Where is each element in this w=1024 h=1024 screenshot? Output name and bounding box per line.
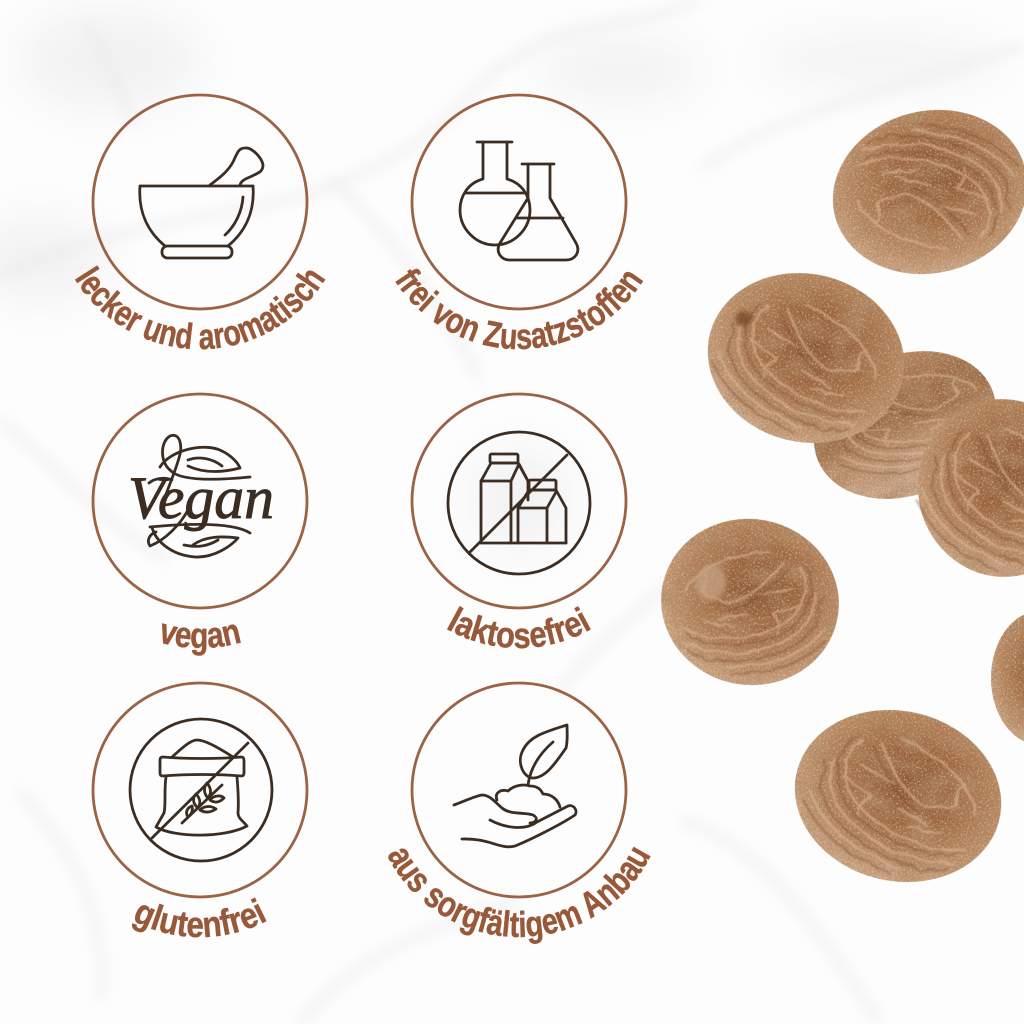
ring	[93, 394, 307, 608]
nutmeg cluster	[648, 89, 1024, 902]
bottom leaf and swash	[148, 510, 250, 557]
top leaf and swash	[149, 435, 250, 500]
label: vegan	[162, 623, 241, 656]
nutmeg: right edge lower	[991, 611, 1024, 745]
icon: crossed milk cartons	[448, 432, 590, 574]
nutmeg: behind, centre right	[792, 325, 1018, 525]
panel: glutenfrei	[92, 682, 308, 938]
panel: laktosefrei	[410, 392, 628, 648]
ring	[412, 95, 626, 309]
panel: vegan	[92, 392, 308, 656]
label: glutenfrei	[132, 897, 267, 938]
ring	[93, 683, 307, 897]
nutmeg: top right	[815, 89, 1024, 294]
nutmeg: large left	[690, 253, 922, 463]
panel: lecker und aromatisch	[74, 94, 326, 350]
icon: vegan lettering with leaves	[128, 435, 274, 557]
label: laktosefrei	[447, 606, 591, 648]
ring	[412, 394, 626, 608]
icon: hand with seedling	[454, 725, 576, 847]
nutmeg: bottom	[778, 690, 1018, 902]
icon: flasks	[460, 142, 578, 260]
icon: mortar and pestle	[140, 148, 263, 258]
panel: aus sorgfältigem Anbau	[388, 682, 651, 944]
nutmeg: lower left	[648, 505, 852, 699]
panel: frei von Zusatzstoffen	[395, 94, 644, 350]
nutmeg: right edge middle	[884, 385, 1024, 606]
label: aus sorgfältigem Anbau	[388, 846, 651, 944]
ring	[93, 95, 307, 309]
label: frei von Zusatzstoffen	[395, 268, 644, 350]
icon: crossed flour sack	[130, 719, 272, 861]
vegan script word: Vegan	[128, 465, 274, 531]
ring	[412, 683, 626, 897]
label: lecker und aromatisch	[74, 265, 326, 350]
